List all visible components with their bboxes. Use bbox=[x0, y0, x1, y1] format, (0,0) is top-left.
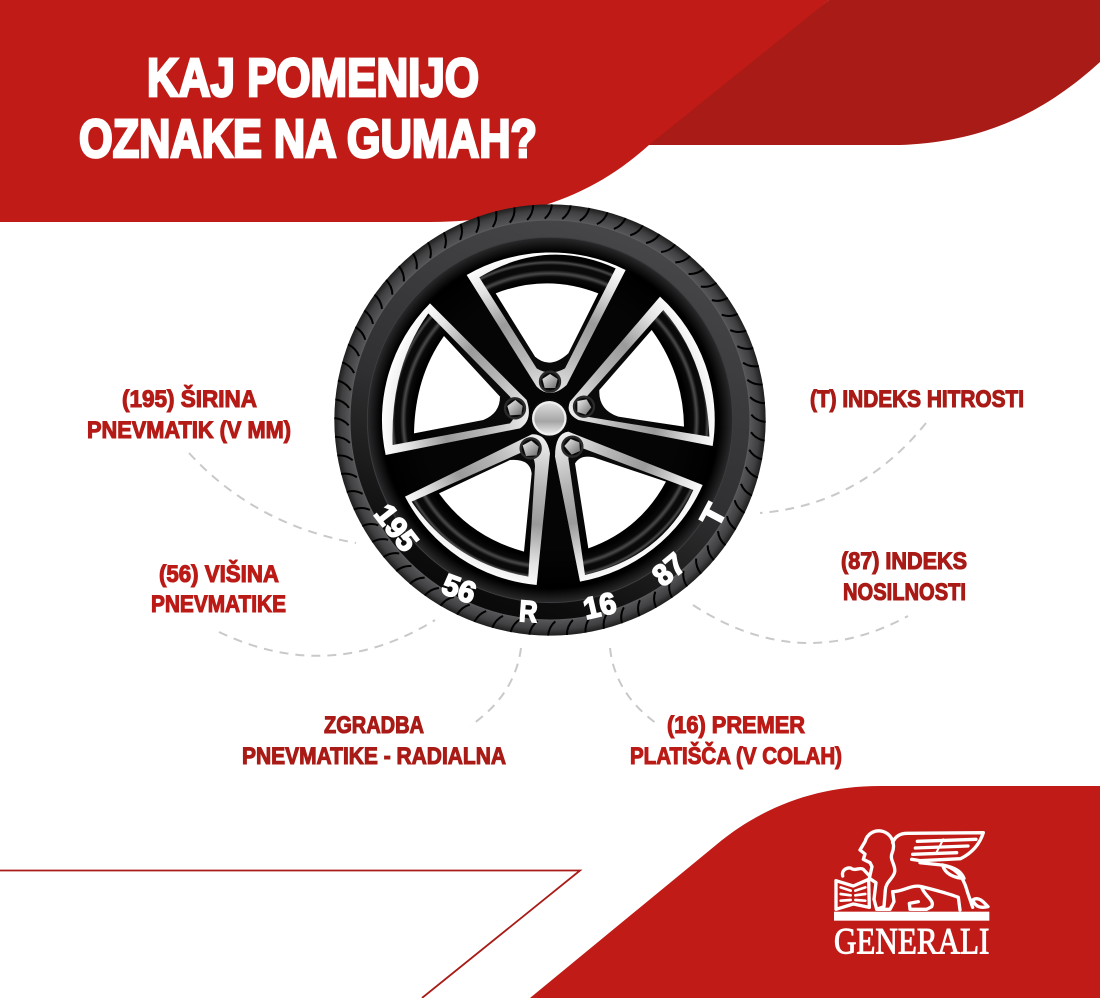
label: radial construction: PNEVMATIKE - RADIALNA bbox=[242, 743, 506, 770]
label: radial construction: ZGRADBA bbox=[324, 712, 424, 739]
title: KAJ POMENIJO bbox=[147, 48, 479, 108]
bottom red corner shape bbox=[530, 786, 1100, 998]
tyre sidewall markings bbox=[367, 498, 733, 629]
label: T speed index: (T) INDEKS HITROSTI bbox=[810, 386, 1024, 413]
label: 87 load index: (87) INDEKS bbox=[841, 548, 967, 575]
lug nuts bbox=[505, 372, 594, 458]
tyre sidewall markings: 195 bbox=[367, 498, 424, 558]
header dark red shape bbox=[640, 0, 1100, 145]
label: 195 width: PNEVMATIK (V MM) bbox=[87, 417, 291, 444]
label: 16 rim diameter: (16) PREMER bbox=[667, 712, 805, 739]
tyre sidewall markings: T bbox=[695, 499, 733, 532]
label: 87 load index: NOSILNOSTI bbox=[843, 579, 966, 606]
logo wordmark: GENERALI bbox=[834, 921, 989, 962]
tyre sidewall markings: 56 bbox=[438, 568, 480, 611]
logo base bar bbox=[834, 912, 989, 921]
label: 56 height: PNEVMATIKE bbox=[151, 591, 286, 618]
label: 56 height bbox=[151, 560, 286, 618]
hub cap bbox=[530, 399, 569, 438]
Generali logo bbox=[834, 831, 989, 962]
tyre sidewall markings: 16 bbox=[580, 587, 619, 626]
label: 195 width: (195) ŠIRINA bbox=[122, 385, 257, 413]
tyre sidewall markings: 87 bbox=[646, 547, 692, 593]
label: 16 rim diameter: PLATIŠČA (V COLAH) bbox=[630, 742, 842, 770]
bottom outline line bbox=[0, 870, 580, 998]
title: OZNAKE NA GUMAH? bbox=[79, 109, 537, 169]
wheel with tyre markings bbox=[334, 204, 766, 636]
dashed connectors bbox=[189, 423, 926, 726]
label: 56 height: (56) VIŠINA bbox=[159, 560, 279, 588]
title bbox=[79, 48, 537, 169]
alloy rim windows bbox=[382, 252, 715, 585]
tyre sidewall bbox=[350, 220, 750, 620]
icon: winged lion with book bbox=[836, 831, 988, 910]
label: 195 width bbox=[87, 385, 291, 444]
tyre tread bbox=[334, 204, 766, 636]
label: 16 rim diameter bbox=[630, 712, 842, 770]
label: radial construction bbox=[242, 712, 506, 770]
header red shape bbox=[0, 0, 829, 222]
label: 87 load index bbox=[841, 548, 967, 606]
tyre sidewall markings: R bbox=[518, 595, 539, 629]
